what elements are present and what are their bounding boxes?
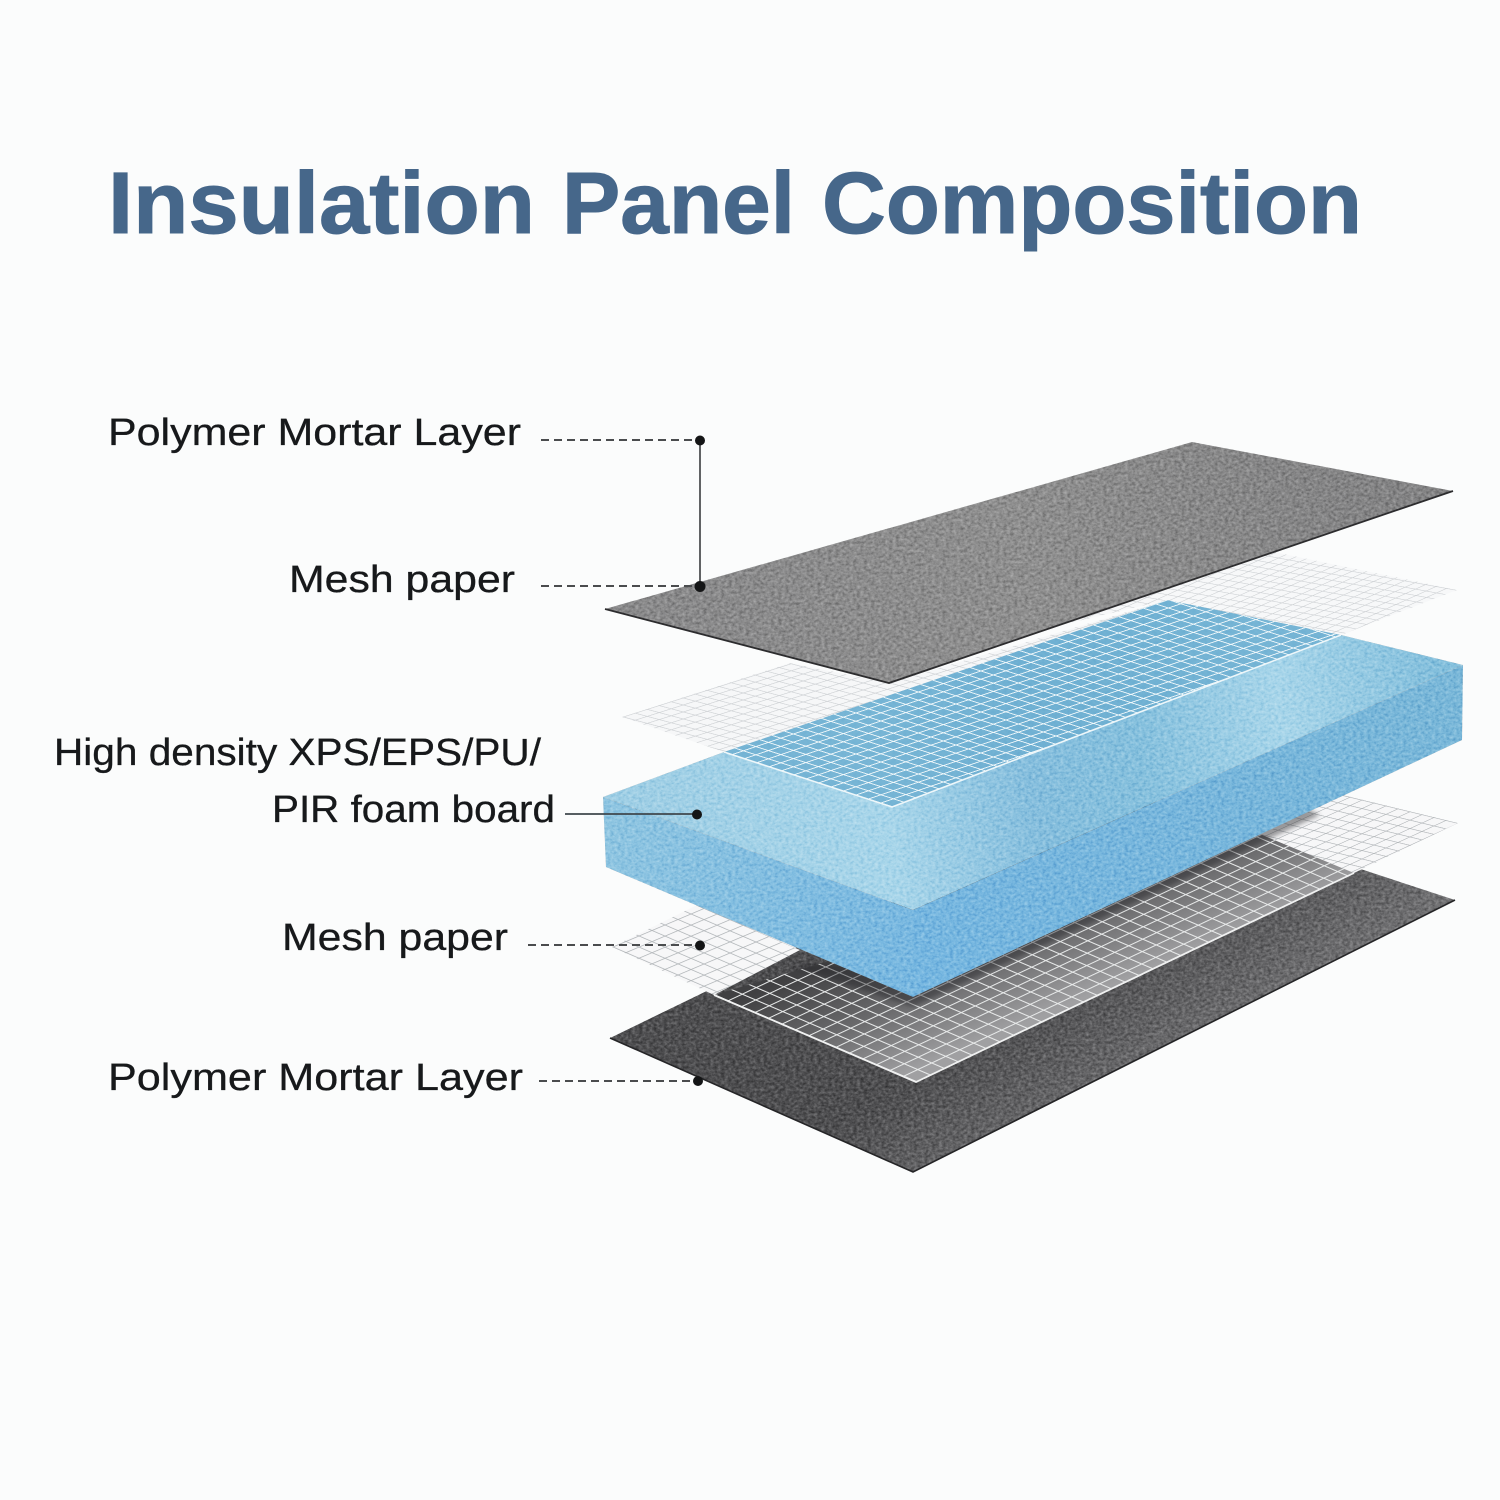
leader: foam board	[565, 810, 702, 820]
panel: layered insulation diagram	[603, 442, 1463, 1172]
leader: mesh paper (lower)	[528, 940, 705, 950]
title: Composition	[822, 155, 1362, 252]
label: polymer mortar layer (top): Polymer Mortar Layer	[108, 412, 521, 454]
label: foam board: PIR foam board	[272, 789, 555, 831]
bottom polymer mortar sheet	[610, 790, 1455, 1172]
top polymer mortar sheet	[605, 442, 1453, 683]
label: foam board	[54, 732, 555, 831]
leader: polymer mortar layer (bottom)	[539, 1076, 703, 1086]
label: mesh paper (lower): Mesh paper	[282, 917, 508, 959]
lower mesh paper	[612, 795, 1458, 1082]
leader: polymer mortar layer (top)	[541, 436, 705, 586]
upper mesh paper	[622, 552, 1457, 807]
label: polymer mortar layer (bottom): Polymer Mortar Layer	[108, 1057, 523, 1099]
label: foam board: High density XPS/EPS/PU/	[54, 732, 541, 774]
label: mesh paper (upper): Mesh paper	[289, 559, 515, 601]
foam board	[603, 600, 1463, 1007]
title: Insulation	[108, 155, 535, 252]
title	[108, 155, 1362, 252]
title: Panel	[562, 155, 795, 252]
leader: mesh paper (upper)	[541, 581, 706, 592]
